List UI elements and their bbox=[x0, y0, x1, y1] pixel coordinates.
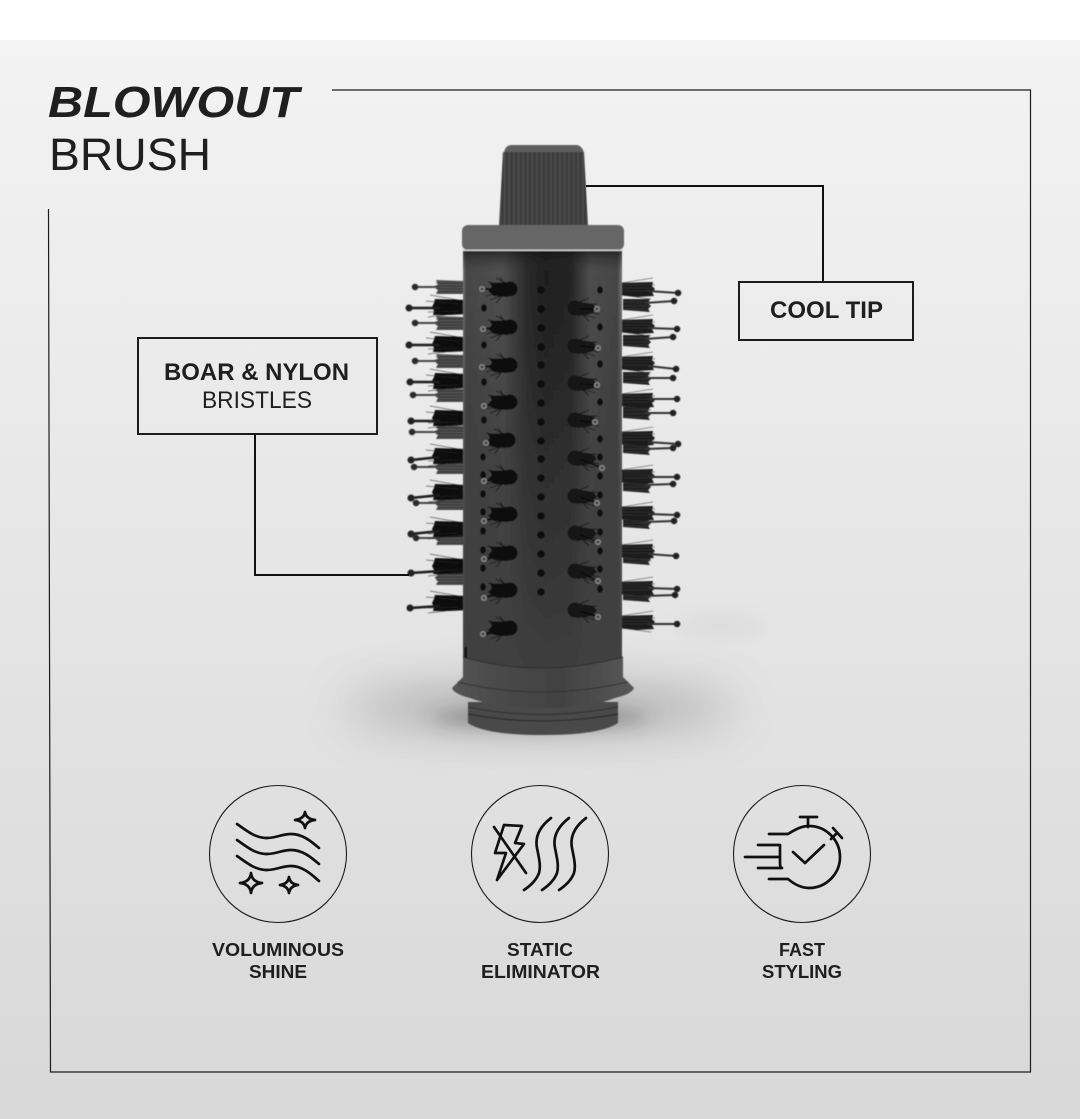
icon: crossed bolt and waves bbox=[494, 818, 586, 890]
feature: voluminous shine: SHINE bbox=[249, 961, 307, 982]
air holes bbox=[464, 286, 603, 659]
icon: stopwatch with speed lines bbox=[745, 817, 842, 888]
feature: static eliminator: STATIC bbox=[507, 939, 573, 960]
product: brush attachment bbox=[409, 145, 678, 735]
title: BRUSH bbox=[49, 129, 211, 180]
title: BLOWOUT bbox=[48, 78, 302, 127]
feature: fast styling: FAST bbox=[779, 939, 826, 960]
base collar and ring bbox=[452, 657, 634, 735]
left dark bristle tufts bbox=[409, 295, 471, 613]
cool tip cap bbox=[462, 145, 624, 251]
icon: waves and sparkles bbox=[237, 812, 319, 893]
callout: boar and nylon bristles: BOAR & NYLON bbox=[164, 359, 349, 386]
frame outline bbox=[48, 90, 1030, 1072]
feature: voluminous shine: VOLUMINOUS bbox=[212, 939, 344, 960]
cylinder body bbox=[463, 251, 622, 671]
floor shadow bbox=[345, 619, 765, 728]
feature: fast styling: STYLING bbox=[762, 961, 842, 982]
feature: voluminous shine bbox=[210, 786, 346, 982]
callout: boar and nylon bristles: BRISTLES bbox=[202, 387, 312, 414]
callout: cool tip: COOL TIP bbox=[770, 297, 883, 324]
callout: cool tip bbox=[586, 186, 913, 340]
right bristle tufts bbox=[614, 278, 678, 632]
title bbox=[48, 78, 302, 180]
front bristle tufts bbox=[479, 277, 605, 642]
rear left grey bristle tufts bbox=[412, 280, 463, 585]
callout: boar and nylon bristles bbox=[138, 338, 409, 575]
feature: fast styling bbox=[734, 786, 870, 982]
feature: static eliminator bbox=[472, 786, 608, 982]
feature: static eliminator: ELIMINATOR bbox=[481, 961, 600, 982]
